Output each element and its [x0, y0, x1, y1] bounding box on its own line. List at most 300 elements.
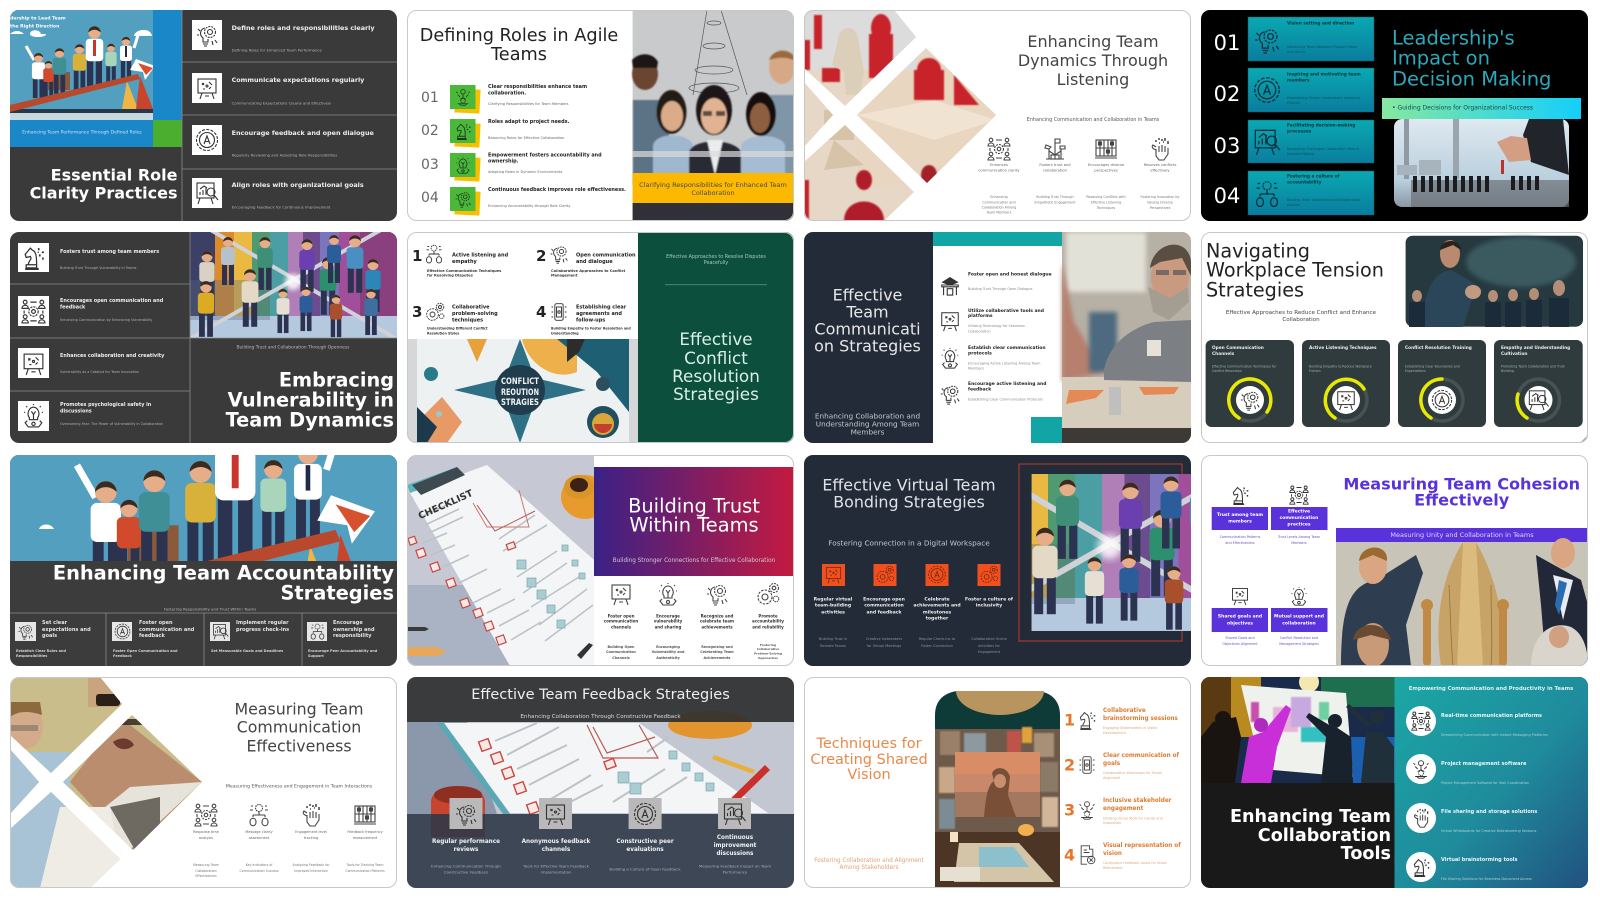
numbered items: Resolution Styles: [427, 331, 459, 335]
title: [235, 700, 363, 756]
icon columns: Encouraging: [656, 645, 681, 649]
numbered items: 4: [536, 303, 546, 321]
left panel: Understanding Among Team: [816, 420, 919, 428]
title: Techniques for: [815, 736, 922, 752]
list: protocols: [968, 350, 992, 356]
photo: checklist with coffee: [407, 455, 594, 666]
list rows: Align roles with organizational goals: [232, 181, 364, 189]
numbered list: Utilizing Visual Tools for Clarity and: [1103, 816, 1163, 820]
card 12: Measuring Team Cohesion Effectively: [1201, 455, 1588, 667]
icon columns: Tools for Effective Team Feedback: [522, 864, 590, 868]
icon columns: Collaborative: [757, 647, 779, 651]
green panel: [638, 232, 794, 443]
icon columns: Recognizing and: [701, 645, 733, 649]
left panel: Members: [851, 428, 885, 436]
icon columns: effectively: [1150, 169, 1170, 173]
list rows: Vulnerability as a Catalyst for Team Innovation: [60, 370, 139, 374]
icon columns: Problem-Solving: [754, 652, 782, 656]
illustration: conflict resolution compass: [407, 339, 638, 443]
card 13: Measuring Team Communication Effectiveness: [7, 677, 397, 888]
numbered items: 2: [536, 247, 546, 265]
title: Dynamics Through: [1018, 51, 1168, 70]
numbered list: Enhancing Accountability through Role Clarity: [488, 204, 571, 208]
numbered list: brainstorming sessions: [1103, 716, 1178, 722]
title: Strategies: [1206, 278, 1304, 302]
icon columns: Creative Icebreakers: [866, 637, 902, 641]
left panel: [804, 232, 933, 443]
title: Collaboration: [1258, 826, 1391, 846]
icon columns: channels: [542, 847, 571, 853]
list rows: Encourage feedback and open dialogue: [232, 129, 375, 137]
teal panel: File sharing and storage solutions: [1441, 809, 1537, 815]
gradient band: • Guiding Decisions for Organizational Success: [1392, 104, 1533, 112]
numbered list: collaboration.: [488, 91, 526, 97]
icon columns: Promote: [758, 614, 778, 618]
photo: hand on figures: [1394, 119, 1569, 207]
numbered teal rows: 04: [1214, 184, 1240, 208]
icon columns: Building Trust Through: [1036, 195, 1074, 199]
icon columns: [193, 804, 385, 878]
photo: checklist with coffee: CHECKLIST: [417, 488, 475, 522]
four columns: responsibility: [333, 633, 372, 639]
title: Enhancing Team: [1230, 807, 1391, 827]
icon columns: [814, 564, 1014, 654]
title: Listening: [1057, 70, 1129, 89]
icon columns: Engagement: [978, 650, 1001, 654]
list rows: Enhances collaboration and creativity: [60, 353, 165, 359]
gradient title band: Building Stronger Connections for Effective Collaboration: [613, 558, 776, 564]
title: Clarity Practices: [30, 184, 178, 202]
four metric tiles: collaboration: [1282, 620, 1316, 626]
title: Embracing: [279, 368, 394, 392]
icon columns: collaboration: [1043, 169, 1068, 173]
image: team on arrow: [10, 10, 182, 147]
icon columns: Measuring Feedback Impact on Team: [699, 864, 771, 868]
teal panel: Project management software: [1441, 761, 1527, 767]
subtitle: Enhancing Communication and Collaboration in Teams: [1027, 117, 1160, 123]
four metric tiles: Members: [1291, 541, 1307, 545]
four metric tiles: Objectives Alignment: [1222, 642, 1258, 646]
icon columns: Enhances: [990, 163, 1008, 167]
card 6: Effective Conflict Resolution Strategies: [407, 232, 794, 458]
four columns: progress check-ins: [236, 627, 289, 633]
icon columns: Foster Connection: [921, 644, 953, 648]
numbered teal rows: Influencing Team Decisions Through Vision: [1287, 45, 1357, 49]
teal panel: Real-time communication platforms: [1441, 713, 1542, 719]
list rows: Encourages open communication and: [60, 298, 164, 304]
icon columns: Collaboration Among: [982, 206, 1016, 210]
icon columns: accountability: [752, 618, 784, 624]
icon columns: Remote Teams: [820, 644, 846, 648]
card 9: Enhancing Team Accountability Strategies: [0, 359, 456, 666]
left panel: on Strategies: [814, 336, 921, 356]
icon columns: Celebrate: [924, 596, 950, 602]
numbered teal rows: members: [1287, 78, 1310, 84]
four metric tiles: Shared Goals and: [1225, 636, 1255, 640]
photo: man pointing: [1406, 236, 1583, 327]
stat tiles: Promoting Team Collaboration and Trust: [1501, 364, 1565, 368]
numbered teal rows: 03: [1214, 134, 1240, 158]
title: Teams: [490, 45, 547, 65]
numbered list: Adapting Roles in Dynamic Environments: [488, 170, 562, 174]
numbered list: Clear responsibilities enhance team: [488, 84, 587, 90]
four metric tiles: practices: [1287, 522, 1311, 528]
numbered list: Empowerment fosters accountability and: [488, 152, 602, 158]
green panel: Effective: [679, 329, 753, 349]
numbered list: [421, 84, 626, 216]
list: Members: [968, 367, 984, 371]
icon columns: celebrate team: [700, 618, 734, 624]
icon columns: Empathetic Engagement: [1035, 200, 1076, 204]
icon columns: evaluations: [626, 847, 664, 853]
numbered list: 02: [421, 123, 439, 139]
four metric tiles: Trust among team: [1217, 512, 1263, 518]
list: Building Trust Through Open Dialogue: [968, 287, 1032, 291]
four metric tiles: and Effectiveness: [1225, 541, 1255, 545]
numbered items: Active listening and: [452, 253, 509, 259]
gradient title band: Within Teams: [629, 514, 759, 536]
numbered teal rows: Facilitating decision-making: [1287, 122, 1355, 128]
numbered items: Management: [551, 274, 578, 278]
four metric tiles: Management Strategies: [1279, 642, 1319, 646]
stat tiles: Friction: [1309, 369, 1321, 373]
teal panel: Virtual Whiteboards for Creative Brainstorming Sessions: [1441, 829, 1537, 833]
icon columns: inclusivity: [976, 602, 1002, 608]
numbered items: agreements and: [576, 311, 622, 317]
icon columns: Response time: [193, 830, 219, 834]
title: Communication: [237, 718, 361, 736]
stat tiles: Establishing Clear Boundaries and: [1405, 364, 1460, 368]
corner mark: [1580, 435, 1588, 443]
subtitle: Enhancing Collaboration Through Constructive Feedback: [520, 714, 681, 720]
four metric tiles: Effective: [1288, 508, 1310, 514]
list rows: Define roles and responsibilities clearly: [232, 24, 375, 32]
list: platforms: [968, 313, 993, 319]
icon columns: team-building: [815, 602, 851, 608]
four columns: Feedback: [113, 654, 132, 658]
four columns: Set clear: [42, 620, 68, 626]
four metric tiles: objectives: [1227, 620, 1253, 626]
icon columns: Channels: [612, 656, 630, 660]
icon columns: Celebrating Team: [700, 650, 734, 654]
teal panel: Virtual brainstorming tools: [1441, 857, 1517, 863]
title: Decision Making: [1392, 68, 1551, 90]
stat tiles: Building Empathy to Reduce Workplace: [1309, 364, 1372, 368]
four columns: Set Measurable Goals and Deadlines: [211, 649, 283, 653]
green panel: Strategies: [673, 384, 759, 404]
title: Creating Shared: [810, 752, 928, 768]
list rows: Encouraging Feedback for Continuous Improvement: [232, 204, 331, 210]
caption band: Enhancing Team Performance Through Defined Roles: [22, 130, 142, 136]
numbered items: Understanding: [551, 331, 579, 335]
numbered items: empathy: [452, 259, 478, 265]
numbered teal rows: processes: [1287, 128, 1312, 134]
stat tiles: Expectations: [1405, 369, 1426, 373]
list rows: Overcoming Fear: The Power of Vulnerability in Collaboration: [60, 422, 163, 426]
icon columns: Effective Listening: [1091, 200, 1121, 204]
card 1: Essential Role Clarity Practices: [0, 0, 397, 221]
list: Establish clear communication: [968, 345, 1046, 351]
list rows: Defining Roles for Enhanced Team Performance: [232, 48, 322, 52]
icon columns: together: [926, 616, 949, 622]
card 14: Effective Team Feedback Strategies: [407, 677, 794, 888]
four metric tiles: communication: [1280, 515, 1318, 521]
four metric tiles: [1212, 486, 1328, 646]
numbered items: problem-solving: [452, 311, 498, 317]
four columns: Establish Clear Roles and: [16, 649, 66, 653]
four columns: Implement regular: [236, 620, 289, 626]
title: Effective Virtual Team: [822, 476, 996, 494]
four metric tiles: Mutual support and: [1274, 614, 1324, 620]
list: Encourage active listening and: [968, 381, 1046, 387]
four columns: expectations and: [42, 627, 91, 633]
numbered list: Development: [1103, 731, 1126, 735]
four columns: [15, 620, 378, 658]
subtitle: [814, 858, 925, 871]
numbered teal rows: 02: [1214, 82, 1240, 106]
list rows: Communicate expectations regularly: [232, 76, 365, 84]
title: Measuring Team Cohesion: [1343, 474, 1580, 494]
icon columns: Foster open: [608, 614, 635, 618]
numbered list: 03: [421, 157, 439, 173]
list rows: Fosters trust among team members: [60, 249, 159, 255]
gradient title band: [594, 467, 794, 576]
numbered list: Balancing Roles for Effective Collaboration: [488, 136, 564, 140]
icon columns: Collaborative Online: [971, 637, 1007, 641]
card 4: Leadership's Impact on Decision Making: [1201, 10, 1588, 221]
icon columns: tracking: [304, 836, 318, 840]
stat tiles: Conflict Resolution Training: [1405, 345, 1472, 351]
icon columns: Performance: [723, 870, 748, 874]
icon columns: and sharing: [655, 624, 682, 630]
title: [1230, 807, 1391, 864]
stat tiles: Conflict Resolution: [1212, 369, 1242, 373]
list rows: feedback: [60, 304, 86, 310]
numbered list: Collaborative Workshops for Vision: [1103, 771, 1162, 775]
title: Navigating: [1206, 240, 1310, 262]
illustration: conflict resolution compass: CONFLICT: [501, 377, 540, 387]
icon columns: Building a Culture of Open Feedback: [609, 866, 681, 872]
green panel: Effective Approaches to Resolve Disputes: [666, 254, 766, 260]
icon columns: Fostering: [760, 643, 776, 647]
list: Collaboration: [968, 329, 991, 333]
numbered list: Continuous feedback improves role effectiveness.: [488, 187, 626, 193]
title: Effectively: [1414, 490, 1510, 510]
icon columns: channels: [611, 624, 632, 630]
title: Strategies: [280, 582, 394, 604]
photo: bearded man at table: [1062, 232, 1191, 443]
subtitle: Fostering Responsibility and Trust Within Teams: [164, 606, 256, 612]
icon columns: communication clarity: [978, 169, 1020, 173]
four columns: feedback: [139, 633, 165, 639]
icon columns: Building Trust in: [819, 637, 847, 641]
numbered list: Visual representation of: [1103, 843, 1181, 849]
four columns: goals: [42, 633, 57, 639]
numbered teal rows: Inspiring and motivating team: [1287, 72, 1361, 78]
left panel: Enhancing Collaboration and: [815, 412, 920, 420]
icon columns: Constructive peer: [616, 839, 674, 845]
icon columns: Collaboration: [195, 869, 217, 873]
list rows: Promotes psychological safety in: [60, 402, 152, 408]
numbered teal rows: Building Trust: Leadership and Collaboration: [1287, 198, 1360, 202]
icon columns: achievements: [701, 624, 733, 630]
icon columns: Encourage: [656, 614, 680, 618]
card 10: Building Trust Within Teams: [407, 455, 794, 666]
numbered items: Understanding Different Conflict: [427, 327, 488, 331]
title: [810, 736, 928, 783]
stat tiles: [1206, 340, 1583, 427]
stat tiles: Building: [1501, 369, 1514, 373]
icon columns: Communication and: [982, 200, 1016, 204]
icon columns: Engagement level: [295, 830, 327, 834]
icon columns: Message clarity: [245, 830, 273, 834]
numbered list: Refinement: [1103, 866, 1123, 870]
icon columns: Approaches: [758, 656, 778, 660]
icon columns: Regular Check-Ins to: [919, 637, 955, 641]
list rows: Communicating Expectations Clearly and Effectively: [232, 100, 332, 106]
left panel: Team: [845, 302, 889, 322]
list rows: discussions: [60, 408, 92, 414]
stat tiles: Effective Communication Techniques for: [1212, 364, 1277, 368]
list rows: [192, 20, 375, 210]
photo: men with wooden ship: [1336, 538, 1588, 667]
numbered list: Inspiration: [1103, 821, 1121, 825]
icon columns: Foster a culture of: [965, 596, 1014, 602]
title: Effective Team Feedback Strategies: [471, 687, 730, 703]
icon columns: Encourage open: [863, 596, 905, 602]
card 2: Defining Roles in Agile Teams: [407, 10, 795, 221]
green panel: Peacefully: [704, 260, 728, 266]
numbered teal rows: 01: [1214, 31, 1240, 55]
icon columns: Feedback frequency: [347, 830, 383, 834]
numbered list: Clear communication of: [1103, 753, 1180, 759]
teal panel: [1394, 677, 1588, 888]
icon columns: achievements and: [913, 602, 961, 608]
icon columns: assessment: [249, 836, 270, 840]
numbered teal rows: Decision-Making: [1287, 152, 1314, 156]
numbered list: 1: [1064, 710, 1075, 730]
purple band: Measuring Unity and Collaboration in Teams: [1390, 531, 1534, 539]
framed image: [925, 427, 1315, 649]
icon columns: analysis: [199, 836, 213, 840]
title: Workplace Tension: [1206, 258, 1384, 282]
numbered items: Open communication: [576, 253, 636, 259]
list rows: Enhancing Communication by Embracing Vulnerability: [60, 318, 152, 322]
four columns: Encourage: [333, 620, 363, 626]
numbered items: Collaborative: [452, 305, 490, 311]
four metric tiles: Trust Levels Among Team: [1277, 535, 1320, 539]
stat tiles: Cultivation: [1501, 351, 1527, 357]
four columns: Support: [308, 654, 324, 658]
subtitle: Building Trust and Collaboration Through Openness: [237, 344, 350, 350]
numbered list: ownership.: [488, 158, 519, 164]
numbered list: [1064, 708, 1181, 870]
numbered list: Alignment: [1103, 776, 1121, 780]
icon columns: Resolves conflicts: [1144, 163, 1176, 167]
card 3: Enhancing Team Dynamics Through Listening: [804, 10, 1191, 221]
icon columns: Tools for Tracking Team: [346, 863, 383, 867]
subtitle: Fostering Collaboration and Alignment: [814, 858, 925, 864]
illustration: conflict resolution compass: REOUTION: [501, 388, 539, 398]
image: team on arrow: the Right Direction: [10, 24, 59, 30]
icon columns: Communication Patterns: [345, 869, 385, 873]
icon columns: communication: [864, 602, 904, 608]
title: [1392, 26, 1551, 90]
stat tiles: Channels: [1212, 351, 1235, 357]
icon columns: Constructive Feedback: [444, 870, 489, 874]
numbered items: Effective Communication Techniques: [427, 269, 501, 273]
four metric tiles: members: [1228, 518, 1252, 524]
title: Leadership's: [1392, 26, 1515, 50]
green panel: Resolution: [672, 366, 760, 386]
icon columns: Authenticity: [656, 656, 681, 660]
teal panel: Project Management Software for Task Coordination: [1441, 781, 1529, 785]
list: Foster open and honest dialogue: [968, 272, 1052, 278]
icon columns: Measuring Team: [193, 863, 219, 867]
stat tiles: Empathy and Understanding: [1501, 345, 1570, 351]
teal accents: [933, 232, 1062, 443]
numbered items: follow-ups: [576, 317, 605, 323]
image: team on arrow enlarged: [10, 455, 397, 561]
list rows: Regularly Reviewing and Adjusting Role Responsibilities: [232, 152, 337, 158]
card 8: Navigating Workplace Tension Strategies: [1201, 232, 1588, 443]
four columns: communication and: [139, 627, 195, 633]
numbered teal rows: Empowering Others: Leadership's Impact on: [1287, 96, 1360, 100]
four columns: Foster Open Communication and: [113, 649, 178, 653]
icon columns: Communication Success: [240, 869, 279, 873]
numbered teal rows: Choices: [1287, 203, 1300, 207]
icon columns: [978, 138, 1179, 214]
title: [53, 562, 394, 604]
four columns: Encourage Peer Accountability and: [308, 649, 378, 653]
title: Bonding Strategies: [833, 492, 985, 512]
title: Impact on: [1392, 46, 1490, 70]
icon columns: Improved Interaction: [294, 869, 328, 873]
icon columns: Fosters trust and: [1039, 163, 1071, 167]
teal panel: Streamlining Communication with Instant Messaging Platforms: [1441, 733, 1548, 737]
list rows: [18, 243, 165, 431]
icon columns: vulnerability: [654, 618, 683, 624]
mosaic photo: red figures: [804, 10, 1004, 221]
four metric tiles: Communication Patterns: [1220, 535, 1261, 539]
icon columns: Key Indicators of: [246, 863, 273, 867]
icon columns: Techniques: [1096, 206, 1115, 210]
icon columns: improvement: [714, 843, 757, 849]
icon columns: Enhancing Communication Through: [431, 864, 501, 868]
numbered list: 01: [421, 90, 439, 106]
photo: business team: [632, 10, 795, 221]
numbered list: 4: [1064, 846, 1075, 864]
overlays: [407, 677, 794, 888]
numbered items: Collaborative Approaches to Conflict: [551, 269, 625, 273]
icon columns: reviews: [454, 847, 479, 853]
numbered teal rows: [1214, 17, 1374, 215]
four columns: Responsibilities: [16, 654, 47, 658]
icon columns: measurement: [353, 836, 378, 840]
four metric tiles: Shared goals and: [1218, 614, 1262, 620]
mosaic photo: men talking: [7, 677, 210, 888]
subtitle: Measuring Effectiveness and Engagement in Team Interactions: [226, 784, 373, 790]
icon columns: and reliability: [752, 624, 784, 630]
subtitle: Effective Approaches to Reduce Conflict and Enhance: [1226, 310, 1377, 316]
icon columns: Enhancing: [990, 195, 1008, 199]
title: [226, 368, 394, 432]
icon columns: milestones: [923, 610, 951, 616]
title: Vision: [847, 767, 891, 783]
stat tiles: Active Listening Techniques: [1309, 345, 1377, 351]
icon columns: communication: [604, 618, 638, 624]
numbered items: Establishing clear: [576, 305, 627, 311]
